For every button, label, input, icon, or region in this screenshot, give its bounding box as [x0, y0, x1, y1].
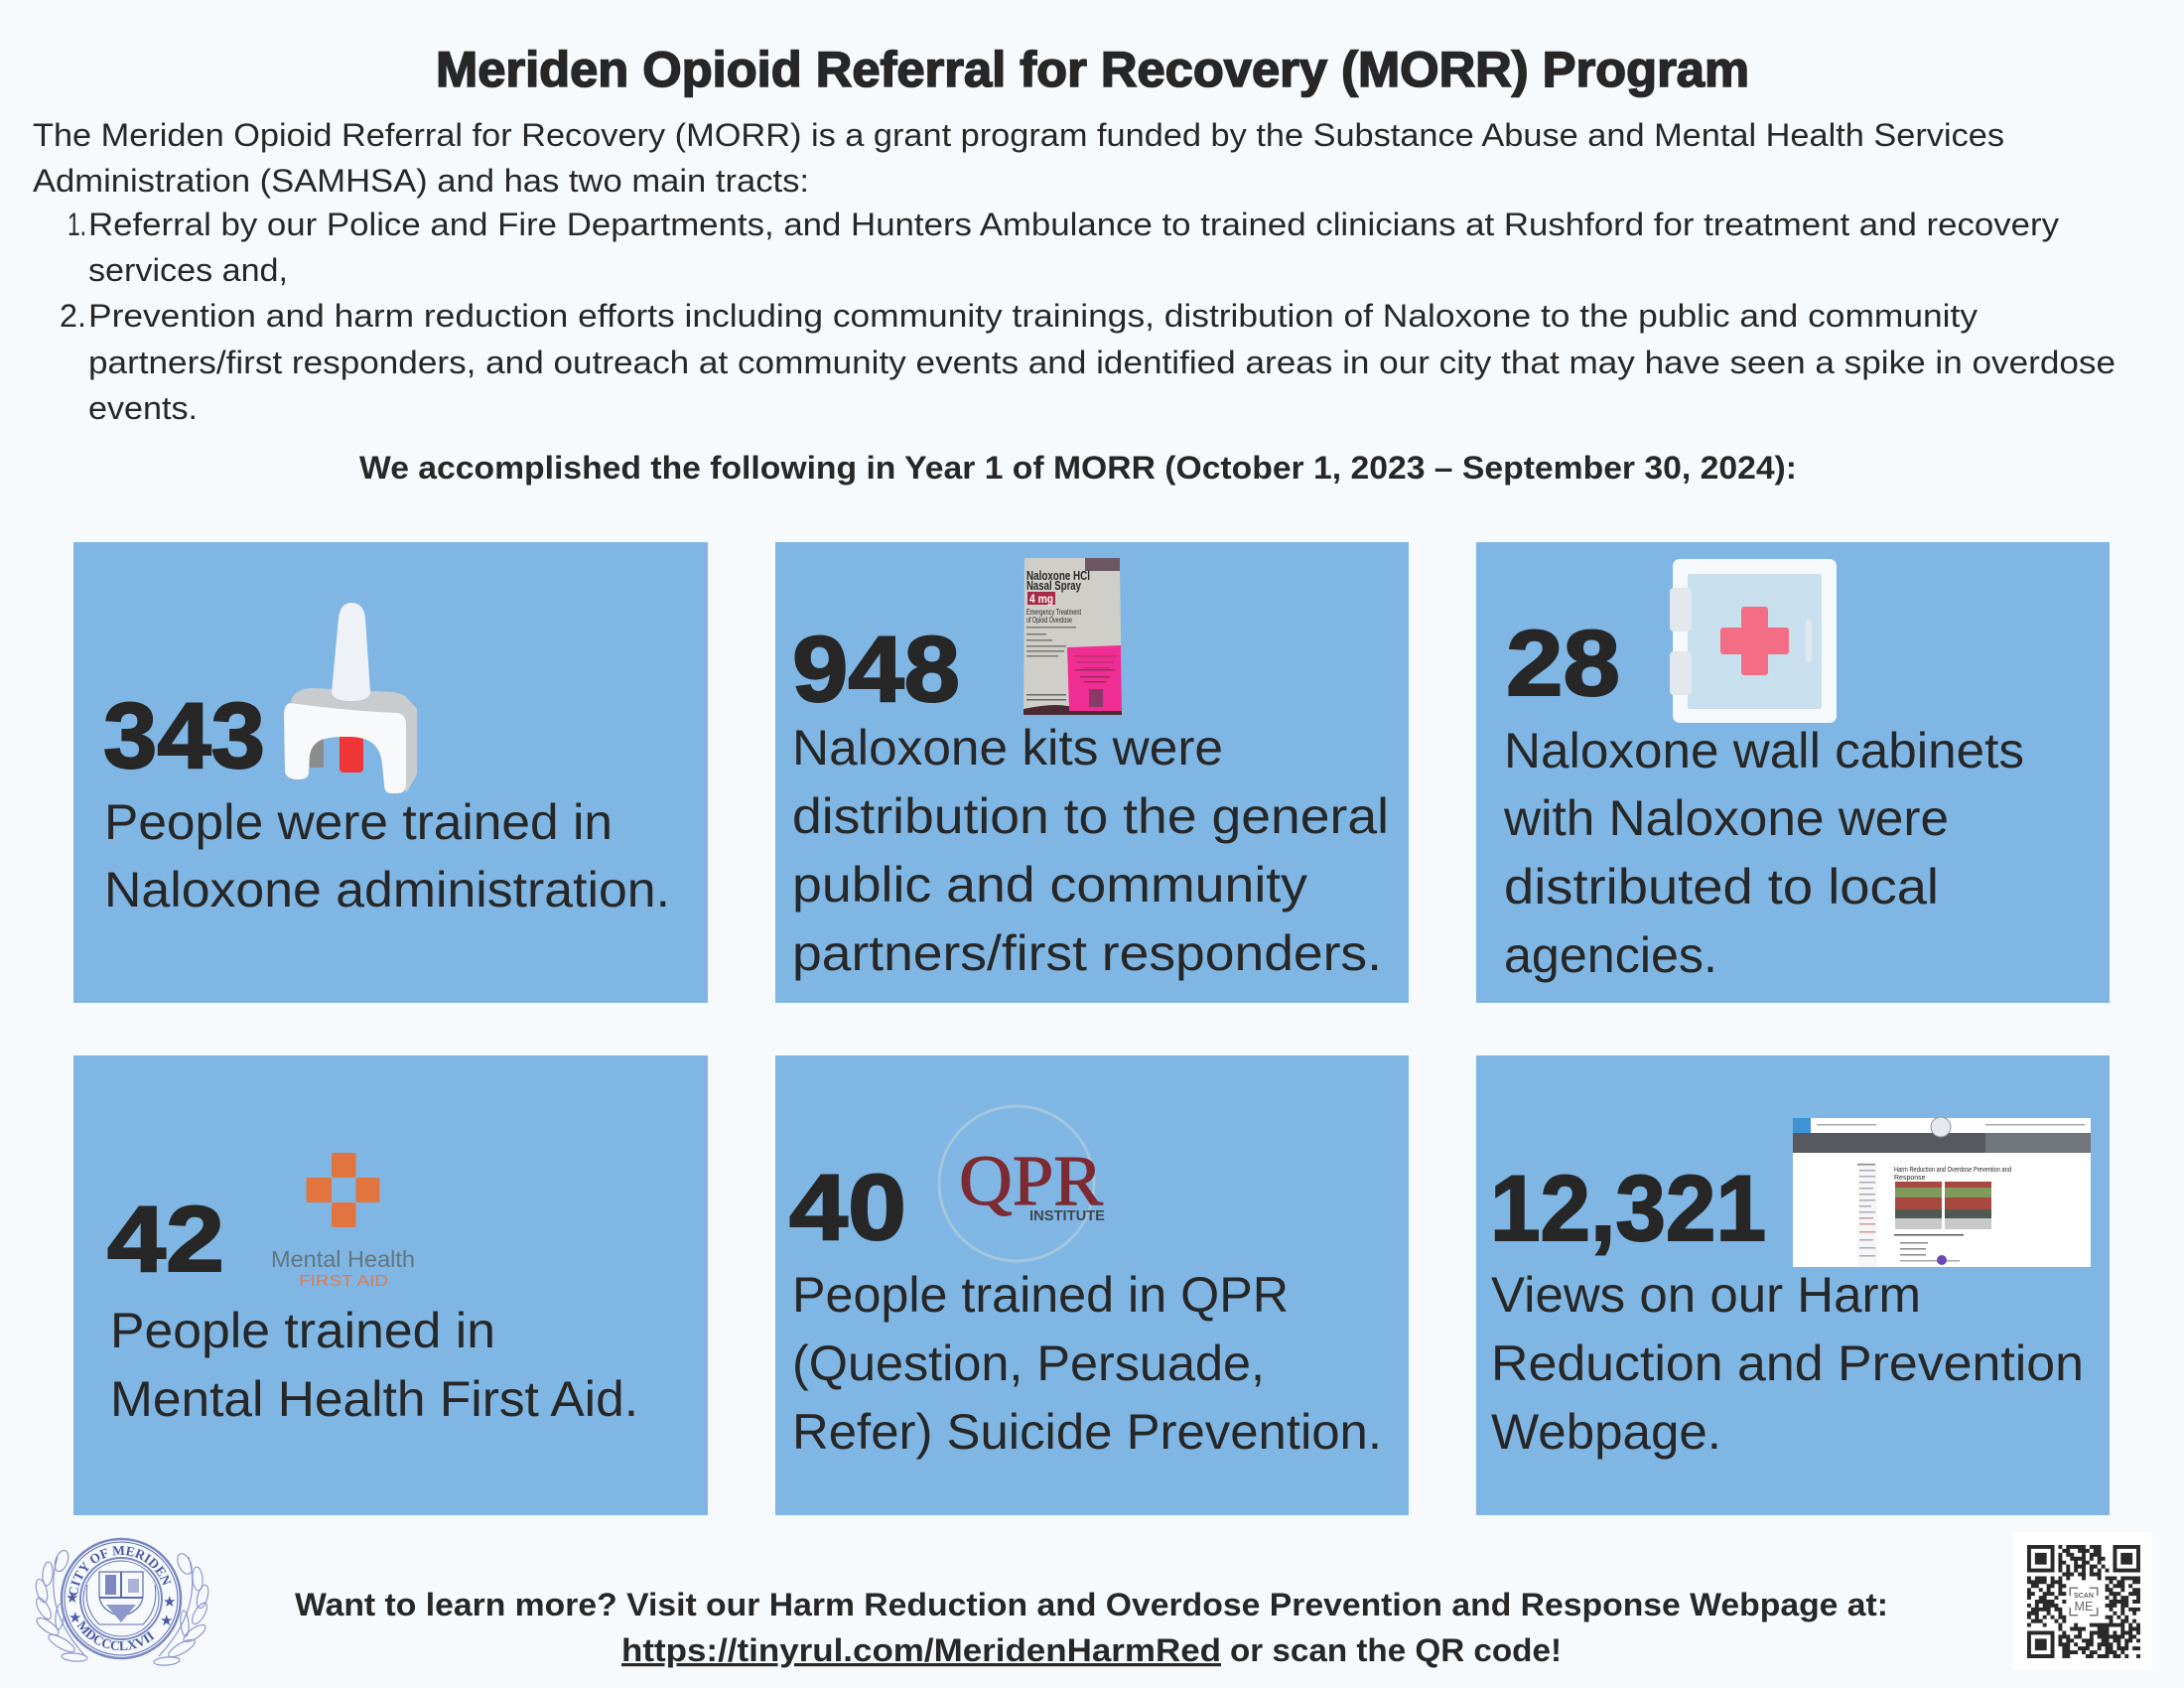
QR code: SCAN [2074, 1593, 2094, 1600]
description: Naloxone wall cabinets [1504, 723, 2024, 778]
image: naloxone box: Naloxone HCl [1026, 568, 1090, 583]
subheading: We accomplished the following in Year 1 of MORR (October 1, 2023 – September 30, 2024): [359, 450, 1797, 486]
image: naloxone box [1024, 558, 1122, 715]
intro text block: partners/first responders, and outreach at community events and identified areas in our city that may have seen a spike in overdose [88, 345, 2116, 380]
description: distribution to the general [792, 788, 1389, 844]
seal: city of Meriden: ★ [68, 1610, 81, 1626]
description: distributed to local [1504, 859, 1939, 914]
description: partners/first responders. [792, 925, 1382, 981]
description: Naloxone administration. [104, 862, 670, 917]
description: People trained in [110, 1303, 495, 1358]
intro text block: 1. [68, 207, 86, 242]
stat: 948: 948 [792, 617, 960, 721]
footer call to action: https://tinyrul.com/MeridenHarmRed [621, 1632, 1221, 1668]
logo: mental health first aid: Mental Health [271, 1246, 415, 1272]
description [792, 720, 1389, 981]
seal: city of Meriden: MDCCCLXVII [76, 1620, 155, 1650]
description: People were trained in [104, 794, 613, 850]
intro text block: Referral by our Police and Fire Departments, and Hunters Ambulance to trained clinicians at Rushford for treatment and recovery [88, 207, 2059, 242]
logo: mental health first aid [271, 1153, 415, 1290]
seal: city of Meriden: CITY OF MERIDEN [69, 1545, 171, 1596]
description: public and community [792, 857, 1307, 913]
image: naloxone box: Nasal Spray [1026, 578, 1082, 593]
image: webpage screenshot: Response [1894, 1175, 1926, 1182]
panel: naloxone kits [775, 542, 1409, 1003]
intro text block [33, 117, 2116, 426]
intro text block: Prevention and harm reduction efforts including community trainings, distribution of Naloxone to the public and community [88, 298, 1978, 334]
panel: mental health first aid [73, 1055, 708, 1515]
intro text block: services and, [88, 252, 288, 288]
image: webpage screenshot [1793, 1117, 2091, 1267]
panel: webpage views [1476, 1055, 2110, 1515]
description: Naloxone kits were [792, 720, 1223, 775]
panel: wall cabinets [1476, 542, 2110, 1003]
stat: 28: 28 [1506, 611, 1620, 715]
panel: people trained in naloxone [73, 542, 708, 1003]
seal: city of Meriden: ★ [163, 1594, 176, 1611]
description: (Question, Persuade, [792, 1336, 1265, 1391]
description: Views on our Harm [1491, 1267, 1921, 1323]
QR code: ME [2075, 1600, 2093, 1614]
logo: QPR institute: QPR [959, 1141, 1103, 1220]
logo: mental health first aid: FIRST AID [299, 1273, 388, 1290]
stat: 12,321: 12,321 [1490, 1156, 1766, 1260]
description [1491, 1267, 2084, 1460]
footer call to action: or scan the QR code! [1230, 1632, 1562, 1668]
stat: 42: 42 [107, 1187, 224, 1291]
image: webpage screenshot: Harm Reduction and Overdose Prevention and [1894, 1167, 2011, 1174]
description: Webpage. [1491, 1404, 1721, 1460]
description [110, 1303, 638, 1427]
seal: city of Meriden: ★ [66, 1590, 78, 1607]
title: Meriden Opioid Referral for Recovery (MORR) Program [436, 42, 1749, 97]
description [792, 1267, 1382, 1460]
icon: wall cabinet with cross [1670, 559, 1837, 723]
description: People trained in QPR [792, 1267, 1289, 1323]
stat: 40: 40 [789, 1155, 906, 1259]
logo: QPR institute: INSTITUTE [1029, 1207, 1105, 1224]
description: agencies. [1504, 927, 1717, 983]
description: Reduction and Prevention [1491, 1336, 2084, 1391]
panel: QPR [775, 1055, 1409, 1515]
logo: QPR institute [939, 1106, 1105, 1261]
footer call to action [295, 1587, 1888, 1668]
image: naloxone box: Emergency Treatment [1026, 608, 1082, 617]
seal: city of Meriden: ★ [160, 1613, 173, 1629]
description: Refer) Suicide Prevention. [792, 1404, 1382, 1460]
intro text block: events. [88, 390, 198, 426]
icon: nasal spray device [284, 603, 417, 793]
intro text block: The Meriden Opioid Referral for Recovery (MORR) is a grant program funded by the Substance Abuse and Mental Health Services [33, 117, 2004, 153]
intro text block: Administration (SAMHSA) and has two main tracts: [33, 163, 809, 199]
image: naloxone box: 4 mg [1029, 592, 1053, 606]
footer call to action: Want to learn more? Visit our Harm Reduction and Overdose Prevention and Response Webpage at: [295, 1587, 1888, 1622]
description: with Naloxone were [1503, 790, 1949, 846]
intro text block: 2. [60, 298, 86, 334]
description: Mental Health First Aid. [110, 1371, 638, 1427]
description [1503, 723, 2024, 983]
wreath [34, 1549, 210, 1666]
stat: 343: 343 [103, 683, 265, 787]
image: naloxone box: of Opioid Overdose [1026, 616, 1072, 625]
description [104, 794, 670, 917]
seal: city of Meriden [36, 1537, 208, 1666]
QR code [2013, 1532, 2152, 1670]
